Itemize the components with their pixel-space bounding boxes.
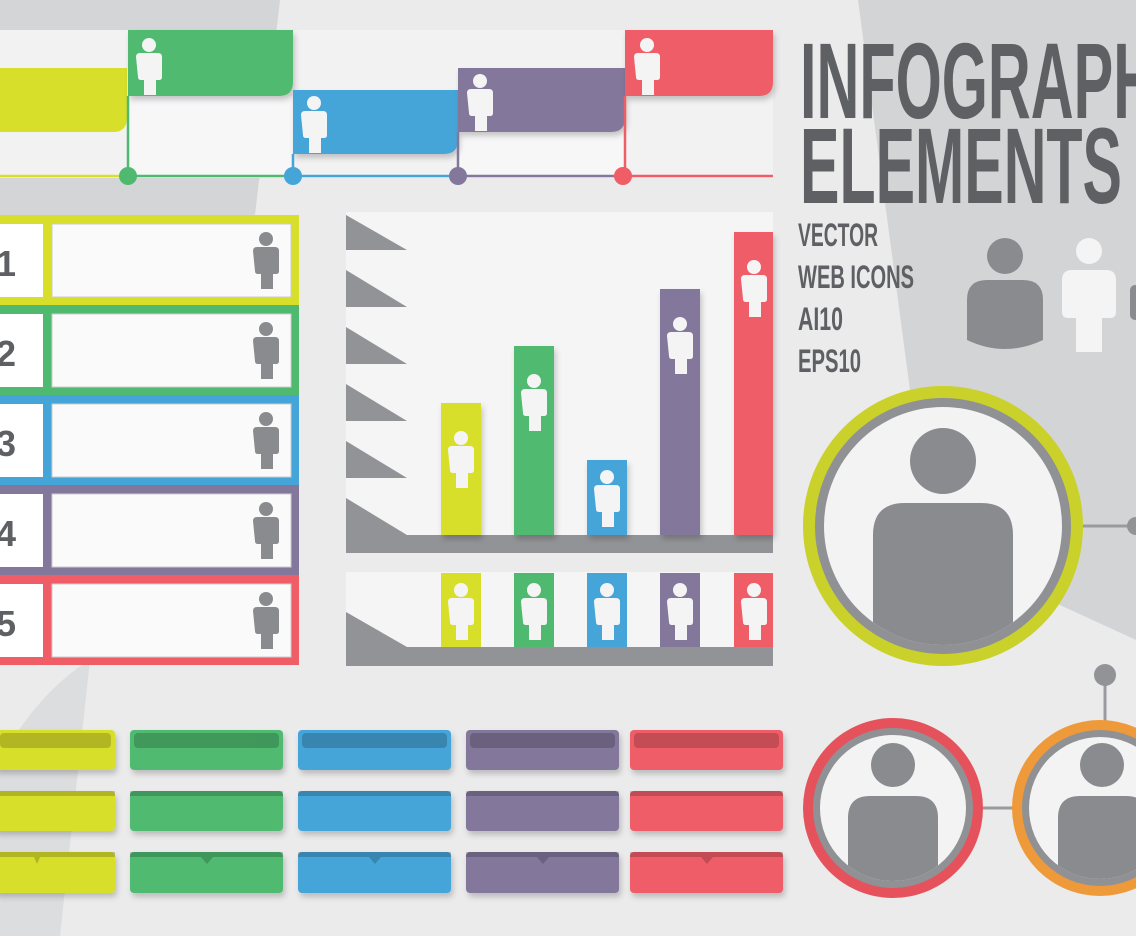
small bar chart xyxy=(346,572,773,666)
subtitle text xyxy=(798,217,914,379)
numbered list xyxy=(0,215,299,665)
tab: blue xyxy=(293,90,458,154)
timeline tabs xyxy=(0,30,773,185)
subtitle text: WEB ICONS xyxy=(798,259,914,295)
subtitle text: EPS10 xyxy=(798,343,861,379)
subtitle text: VECTOR xyxy=(798,217,878,253)
small profile circles xyxy=(803,664,1136,898)
icons: people xyxy=(967,238,1136,352)
item 3 xyxy=(0,395,299,485)
item 4 xyxy=(0,485,299,575)
tab: red xyxy=(625,30,773,96)
tab: purple xyxy=(458,68,625,132)
title xyxy=(800,20,1136,226)
item 5 xyxy=(0,575,299,665)
item 1 xyxy=(0,215,299,305)
big profile circle xyxy=(803,386,1136,666)
item 2 xyxy=(0,305,299,395)
bar chart xyxy=(346,212,773,553)
tab: yellow xyxy=(0,68,127,132)
buttons grid xyxy=(0,730,783,893)
tab: green xyxy=(128,30,293,96)
subtitle text: AI10 xyxy=(798,301,843,337)
